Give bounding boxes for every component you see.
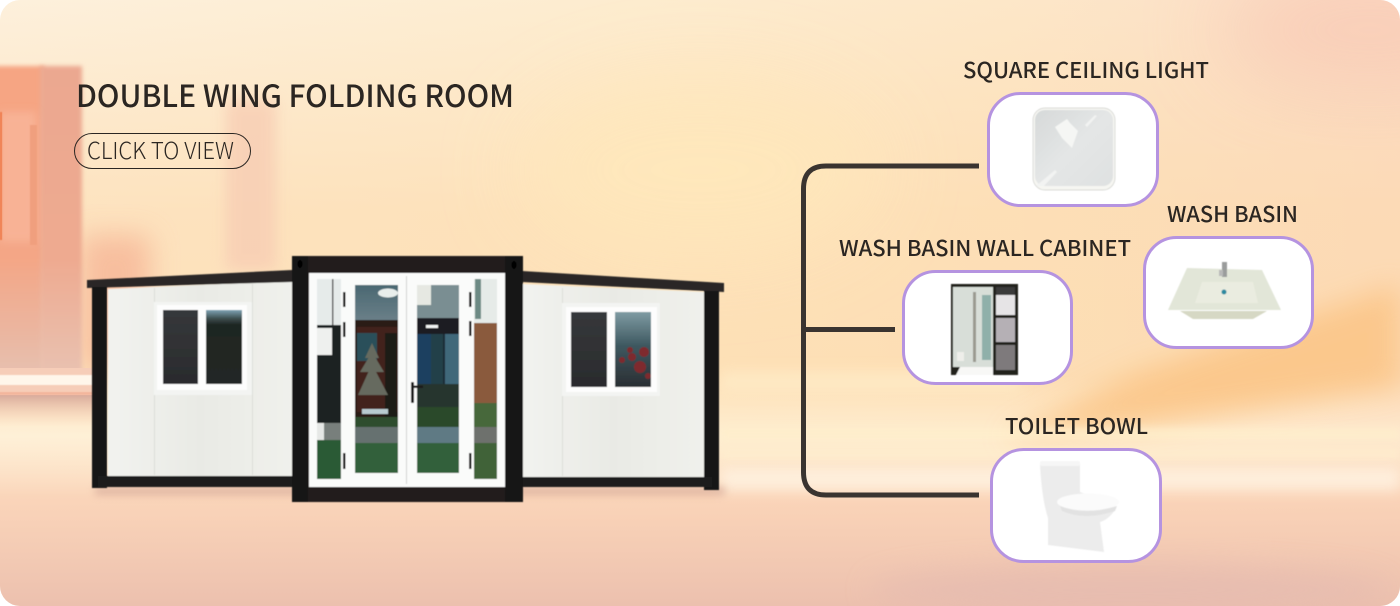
connector bracket: [804, 166, 979, 495]
icon: cabinet: [951, 284, 1018, 375]
item: wash basin wall cabinet: WASH BASIN WALL CABINET: [839, 231, 1131, 263]
right wing: [522, 271, 724, 490]
button: click to view: CLICK TO VIEW: [87, 132, 234, 166]
title: DOUBLE WING FOLDING ROOM: [76, 72, 514, 116]
item: square ceiling light: SQUARE CEILING LIGHT: [963, 53, 1209, 85]
left wing: [87, 270, 292, 488]
left door glass: [355, 285, 398, 473]
icon: toilet: [1040, 461, 1119, 552]
icon: ceiling light: [1033, 108, 1115, 190]
door centre line: [406, 276, 407, 484]
folding room product image: [87, 256, 724, 502]
hinges: [343, 292, 472, 469]
centre frame: [292, 256, 523, 502]
left sidelight: [317, 279, 341, 479]
item: square ceiling light: [963, 53, 1209, 206]
item: toilet bowl: TOILET BOWL: [1005, 409, 1148, 441]
icon: basin: [1168, 262, 1281, 319]
item: wash basin: WASH BASIN: [1167, 197, 1298, 229]
right sidelight: [474, 279, 497, 323]
left blurred building: [0, 66, 150, 427]
item: toilet bowl: [992, 409, 1160, 562]
item: wash basin: [1144, 197, 1312, 348]
tree: [358, 343, 388, 395]
item: wash basin wall cabinet: [839, 231, 1131, 384]
right door glass: [417, 285, 459, 473]
door handle: [411, 382, 423, 403]
